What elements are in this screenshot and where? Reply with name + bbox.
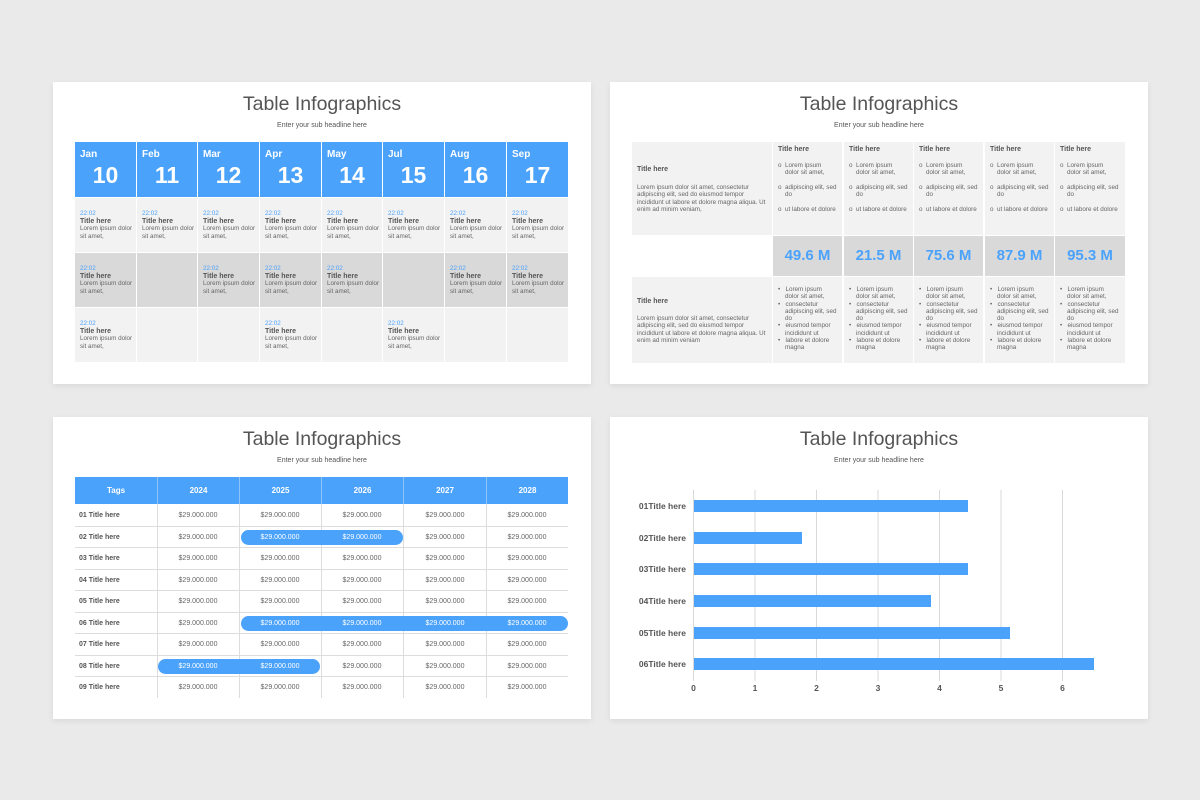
table rows: $29.000.000 xyxy=(261,534,299,540)
table rows: $29.000.000 xyxy=(261,576,299,584)
calendar body: Title here xyxy=(265,273,296,280)
row 1: sit amet, xyxy=(80,233,104,240)
row 1: Title here xyxy=(80,218,111,225)
table header: 2024 xyxy=(190,486,207,495)
column texts: • Lorem ipsum xyxy=(849,286,893,293)
column texts: o adipiscing elit, sed xyxy=(990,184,1048,191)
calendar body: Lorem ipsum dolor xyxy=(265,335,317,342)
calendar body: 22:02 xyxy=(450,265,466,272)
table rows: $29.000.000 xyxy=(261,512,299,519)
row 3 columns xyxy=(773,277,1125,363)
column texts: • consectetur xyxy=(849,301,889,308)
calendar body: 22:02 xyxy=(203,210,219,217)
column texts: incididunt ut xyxy=(997,330,1031,337)
row 2: Title here xyxy=(80,273,111,280)
table rows: $29.000.000 xyxy=(343,620,381,626)
axis labels: 2 xyxy=(814,683,819,693)
calendar header: 17 xyxy=(525,162,550,188)
column texts: o ut labore et dolore xyxy=(1060,206,1118,213)
panel: comparison table xyxy=(610,82,1148,384)
table rows: $29.000.000 xyxy=(261,641,299,648)
table rows: $29.000.000 xyxy=(508,684,546,691)
table rows: $29.000.000 xyxy=(426,620,464,626)
calendar body: 22:02 xyxy=(203,265,219,272)
calendar body: 22:02 xyxy=(450,210,466,217)
axis labels: 6 xyxy=(1060,683,1065,693)
row 3: 22:02 xyxy=(80,320,96,327)
column texts: • labore et dolore xyxy=(919,337,970,344)
table rows: $29.000.000 xyxy=(179,534,217,540)
table rows: $29.000.000 xyxy=(179,598,217,605)
calendar body: 22:02 xyxy=(512,210,528,217)
calendar header: Jan xyxy=(80,149,97,160)
column texts: do xyxy=(785,315,792,322)
table rows: $29.000.000 xyxy=(261,684,299,691)
column texts xyxy=(778,146,1118,351)
table rows xyxy=(75,512,568,691)
table rows: $29.000.000 xyxy=(508,641,546,648)
table rows: $29.000.000 xyxy=(508,620,546,626)
calendar header: 12 xyxy=(216,162,241,188)
calendar body: sit amet, xyxy=(327,233,351,240)
calendar body: sit amet, xyxy=(203,288,227,295)
column texts: Title here xyxy=(1060,146,1091,153)
column texts: • Lorem ipsum xyxy=(990,286,1034,293)
category labels: 01Title here xyxy=(639,501,686,511)
row 2 numbers: 87.9 M xyxy=(997,247,1042,264)
row 1: 22:02 xyxy=(80,210,96,217)
table rows: $29.000.000 xyxy=(343,534,381,540)
table rows: $29.000.000 xyxy=(179,684,217,691)
table rows: $29.000.000 xyxy=(508,555,546,562)
calendar header: 15 xyxy=(401,162,426,188)
column texts: incididunt ut xyxy=(926,330,960,337)
row 1 left: Title here xyxy=(637,166,668,173)
table rows: $29.000.000 xyxy=(343,555,381,562)
table rows: $29.000.000 xyxy=(261,598,299,605)
calendar body: Title here xyxy=(265,328,296,335)
calendar body: Title here xyxy=(142,218,173,225)
column texts: • Lorem ipsum xyxy=(778,286,822,293)
column texts: adipiscing elit, sed xyxy=(926,308,977,315)
table rows: $29.000.000 xyxy=(343,598,381,605)
title: Table Infographics xyxy=(243,428,401,450)
calendar body: 22:02 xyxy=(388,320,404,327)
calendar body: sit amet, xyxy=(388,233,412,240)
row 1 columns xyxy=(773,142,1125,235)
calendar body: sit amet, xyxy=(450,288,474,295)
calendar body: Title here xyxy=(388,328,419,335)
column texts: dolor sit amet, xyxy=(926,169,966,176)
row 3: Lorem ipsum dolor xyxy=(80,335,132,342)
table rows: $29.000.000 xyxy=(426,534,464,540)
table rows: $29.000.000 xyxy=(179,620,217,626)
row 3: Title here xyxy=(80,328,111,335)
column texts: magna xyxy=(997,344,1016,351)
row 3 left: Title here xyxy=(637,298,668,305)
bars xyxy=(694,500,1094,670)
calendar body: Title here xyxy=(265,218,296,225)
column texts: do xyxy=(997,191,1004,198)
row 3: sit amet, xyxy=(80,343,104,350)
category labels: 03Title here xyxy=(639,564,686,574)
row 3 xyxy=(75,308,136,362)
table rows: $29.000.000 xyxy=(343,512,381,519)
calendar body: sit amet, xyxy=(388,343,412,350)
calendar body: Lorem ipsum dolor xyxy=(450,280,502,287)
calendar header: 10 xyxy=(93,162,118,188)
category labels: 06Title here xyxy=(639,659,686,669)
row 2 numbers xyxy=(773,236,1125,276)
calendar body: Lorem ipsum dolor xyxy=(512,280,564,287)
table rows: $29.000.000 xyxy=(343,662,381,670)
column texts: magna xyxy=(856,344,875,351)
column texts: o Lorem ipsum xyxy=(778,162,821,169)
column texts: • eiusmod tempor xyxy=(919,322,972,329)
table rows: 01 Title here xyxy=(79,512,120,519)
calendar body: 22:02 xyxy=(512,265,528,272)
row 2 numbers: 49.6 M xyxy=(785,247,830,264)
calendar header: May xyxy=(327,149,346,160)
table rows: $29.000.000 xyxy=(179,512,217,519)
column texts: • consectetur xyxy=(919,301,959,308)
row 2: sit amet, xyxy=(80,288,104,295)
column texts: dolor sit amet, xyxy=(997,169,1037,176)
table header xyxy=(75,477,568,504)
table rows: $29.000.000 xyxy=(426,684,464,691)
calendar body: sit amet, xyxy=(512,233,536,240)
table rows: $29.000.000 xyxy=(343,641,381,648)
column texts: o Lorem ipsum xyxy=(849,162,892,169)
panel: bar chart xyxy=(610,417,1148,719)
column texts: adipiscing elit, sed xyxy=(1067,308,1118,315)
column texts: o adipiscing elit, sed xyxy=(849,184,907,191)
column texts: dolor sit amet, xyxy=(1067,169,1107,176)
category labels xyxy=(639,501,686,669)
table rows: 07 Title here xyxy=(79,641,120,648)
calendar body: sit amet, xyxy=(265,343,289,350)
column texts: • consectetur xyxy=(1060,301,1100,308)
column texts: Title here xyxy=(778,146,809,153)
table rows: $29.000.000 xyxy=(508,598,546,605)
column texts: Title here xyxy=(919,146,950,153)
row 1 xyxy=(75,198,136,252)
table rows: $29.000.000 xyxy=(179,555,217,562)
column texts: • labore et dolore xyxy=(849,337,900,344)
vertical lines xyxy=(157,504,158,698)
category labels: 04Title here xyxy=(639,596,686,606)
column texts: dolor sit amet, xyxy=(856,293,896,300)
title: Table Infographics xyxy=(243,93,401,115)
column texts: o Lorem ipsum xyxy=(990,162,1033,169)
column texts: do xyxy=(856,315,863,322)
calendar body: Title here xyxy=(450,218,481,225)
column texts: o Lorem ipsum xyxy=(919,162,962,169)
table rows: 09 Title here xyxy=(79,684,120,691)
row 2 xyxy=(75,253,136,307)
calendar body: sit amet, xyxy=(450,233,474,240)
row 2 numbers: 21.5 M xyxy=(856,247,901,264)
calendar header: Aug xyxy=(450,149,469,160)
axis labels: 3 xyxy=(876,683,881,693)
table rows: $29.000.000 xyxy=(179,576,217,584)
calendar header: Jul xyxy=(388,149,402,160)
calendar body: Title here xyxy=(512,218,543,225)
comparison body xyxy=(632,142,1125,363)
column texts: do xyxy=(1067,191,1074,198)
column texts: • consectetur xyxy=(778,301,818,308)
table rows: 03 Title here xyxy=(79,555,120,562)
calendar body: sit amet, xyxy=(142,233,166,240)
calendar body: sit amet, xyxy=(265,288,289,295)
row 3 left: Lorem ipsum dolor sit amet, consectetur adipiscing elit, sed do eiusmod tempor incididunt ut labore et dolore magna aliqua. Ut enim ad minim veniam xyxy=(637,315,765,344)
calendar body: Lorem ipsum dolor xyxy=(142,225,194,232)
calendar body: Title here xyxy=(203,273,234,280)
column texts: dolor sit amet, xyxy=(926,293,966,300)
calendar body: 22:02 xyxy=(388,210,404,217)
calendar body: Title here xyxy=(512,273,543,280)
column texts: o ut labore et dolore xyxy=(778,206,836,213)
table rows: 02 Title here xyxy=(79,534,120,540)
column texts: magna xyxy=(1067,344,1086,351)
column texts: do xyxy=(997,315,1004,322)
table rows: $29.000.000 xyxy=(426,662,464,670)
column texts: • labore et dolore xyxy=(990,337,1041,344)
calendar body: Lorem ipsum dolor xyxy=(265,225,317,232)
calendar body: Lorem ipsum dolor xyxy=(265,280,317,287)
table header: Tags xyxy=(107,486,125,495)
column texts: o ut labore et dolore xyxy=(990,206,1048,213)
calendar body: 22:02 xyxy=(265,265,281,272)
axis labels: 4 xyxy=(937,683,942,693)
table rows: $29.000.000 xyxy=(179,641,217,648)
calendar header: 11 xyxy=(155,162,179,188)
subtitle: Enter your sub headline here xyxy=(834,122,924,129)
calendar body: Lorem ipsum dolor xyxy=(327,225,379,232)
table rows: 04 Title here xyxy=(79,576,120,584)
column texts: dolor sit amet, xyxy=(997,293,1037,300)
table rows: $29.000.000 xyxy=(508,662,546,670)
table rows: $29.000.000 xyxy=(179,662,217,670)
row 2 numbers: 75.6 M xyxy=(926,247,971,264)
subtitle: Enter your sub headline here xyxy=(277,122,367,129)
calendar body: sit amet, xyxy=(327,288,351,295)
subtitle: Enter your sub headline here xyxy=(277,457,367,464)
table rows: $29.000.000 xyxy=(508,576,546,584)
table rows: $29.000.000 xyxy=(343,684,381,691)
column texts: dolor sit amet, xyxy=(785,169,825,176)
calendar body: Title here xyxy=(327,218,358,225)
column texts: incididunt ut xyxy=(785,330,819,337)
column texts: • labore et dolore xyxy=(1060,337,1111,344)
calendar body: Title here xyxy=(450,273,481,280)
column texts: o ut labore et dolore xyxy=(849,206,907,213)
calendar body: Lorem ipsum dolor xyxy=(203,225,255,232)
column texts: magna xyxy=(926,344,945,351)
row 3 left xyxy=(632,277,772,363)
calendar body: Lorem ipsum dolor xyxy=(203,280,255,287)
row 1 left xyxy=(632,142,772,235)
table rows: $29.000.000 xyxy=(426,512,464,519)
column texts: adipiscing elit, sed xyxy=(856,308,907,315)
column texts: adipiscing elit, sed xyxy=(785,308,836,315)
title: Table Infographics xyxy=(800,93,958,115)
table rows: 08 Title here xyxy=(79,662,120,670)
calendar header xyxy=(75,142,568,197)
table rows: 06 Title here xyxy=(79,620,120,626)
column texts: incididunt ut xyxy=(856,330,890,337)
calendar body: 22:02 xyxy=(142,210,158,217)
table rows: $29.000.000 xyxy=(426,576,464,584)
subtitle: Enter your sub headline here xyxy=(834,457,924,464)
calendar body: Lorem ipsum dolor xyxy=(450,225,502,232)
table header: 2025 xyxy=(272,486,289,495)
table rows: $29.000.000 xyxy=(508,512,546,519)
column texts: do xyxy=(926,191,933,198)
table rows: $29.000.000 xyxy=(508,534,546,540)
calendar body: Title here xyxy=(203,218,234,225)
table rows: 05 Title here xyxy=(79,598,120,605)
calendar body: 22:02 xyxy=(327,210,343,217)
title: Table Infographics xyxy=(800,428,958,450)
column texts: o adipiscing elit, sed xyxy=(1060,184,1118,191)
column texts: • Lorem ipsum xyxy=(1060,286,1104,293)
axis labels: 0 xyxy=(691,683,696,693)
column texts: do xyxy=(926,315,933,322)
axis labels: 5 xyxy=(999,683,1004,693)
row 1 left: Lorem ipsum dolor sit amet, consectetur adipiscing elit, sed do eiusmod tempor incididunt ut labore et dolore magna aliqua. Ut enim ad minim veniam, xyxy=(637,184,765,213)
calendar body: sit amet, xyxy=(265,233,289,240)
column texts: do xyxy=(785,191,792,198)
table header: 2028 xyxy=(519,486,536,495)
bar chart xyxy=(639,490,1094,693)
calendar header: Apr xyxy=(265,149,282,160)
column texts: • labore et dolore xyxy=(778,337,829,344)
table rows: $29.000.000 xyxy=(261,555,299,562)
calendar body: Lorem ipsum dolor xyxy=(388,335,440,342)
column texts: • eiusmod tempor xyxy=(990,322,1043,329)
column texts: dolor sit amet, xyxy=(785,293,825,300)
calendar header: 13 xyxy=(278,162,303,188)
table header: 2027 xyxy=(436,486,454,495)
calendar header: Mar xyxy=(203,149,221,160)
column texts: dolor sit amet, xyxy=(1067,293,1107,300)
column texts: do xyxy=(1067,315,1074,322)
calendar body: Lorem ipsum dolor xyxy=(388,225,440,232)
table header: 2026 xyxy=(354,486,371,495)
table rows: $29.000.000 xyxy=(426,641,464,648)
column texts: • Lorem ipsum xyxy=(919,286,963,293)
calendar body: Title here xyxy=(388,218,419,225)
panel: calendar table xyxy=(53,82,591,384)
row 1: Lorem ipsum dolor xyxy=(80,225,132,232)
row 2 numbers: 95.3 M xyxy=(1067,247,1113,264)
calendar body: 22:02 xyxy=(265,210,281,217)
column texts: dolor sit amet, xyxy=(856,169,896,176)
column texts: do xyxy=(856,191,863,198)
column texts: o adipiscing elit, sed xyxy=(919,184,977,191)
category labels: 02Title here xyxy=(639,533,686,543)
column texts: • eiusmod tempor xyxy=(778,322,831,329)
column texts: o Lorem ipsum xyxy=(1060,162,1103,169)
calendar body: Title here xyxy=(327,273,358,280)
column texts: • consectetur xyxy=(990,301,1030,308)
table rows: $29.000.000 xyxy=(261,662,299,670)
row 2: 22:02 xyxy=(80,265,96,272)
column texts: o adipiscing elit, sed xyxy=(778,184,836,191)
column texts: adipiscing elit, sed xyxy=(997,308,1048,315)
column texts: o ut labore et dolore xyxy=(919,206,977,213)
table rows: $29.000.000 xyxy=(261,620,299,626)
axis labels: 1 xyxy=(753,683,758,693)
calendar body: Lorem ipsum dolor xyxy=(512,225,564,232)
calendar body: sit amet, xyxy=(203,233,227,240)
calendar header: Sep xyxy=(512,149,530,160)
column texts: incididunt ut xyxy=(1067,330,1101,337)
column texts: magna xyxy=(785,344,804,351)
calendar body xyxy=(75,198,568,362)
calendar body: 22:02 xyxy=(265,320,281,327)
calendar header: Feb xyxy=(142,149,160,160)
panel: yearly values table xyxy=(53,417,591,719)
table rows: $29.000.000 xyxy=(343,576,381,584)
column texts: • eiusmod tempor xyxy=(849,322,902,329)
column texts: Title here xyxy=(990,146,1021,153)
axis labels xyxy=(691,683,1065,693)
calendar body: sit amet, xyxy=(512,288,536,295)
column texts: • eiusmod tempor xyxy=(1060,322,1113,329)
column texts: Title here xyxy=(849,146,880,153)
table rows: $29.000.000 xyxy=(426,598,464,605)
calendar header: 16 xyxy=(463,162,488,188)
calendar header: 14 xyxy=(339,162,365,188)
calendar body: Lorem ipsum dolor xyxy=(327,280,379,287)
category labels: 05Title here xyxy=(639,628,686,638)
table rows: $29.000.000 xyxy=(426,555,464,562)
calendar body: 22:02 xyxy=(327,265,343,272)
row 2: Lorem ipsum dolor xyxy=(80,280,132,287)
